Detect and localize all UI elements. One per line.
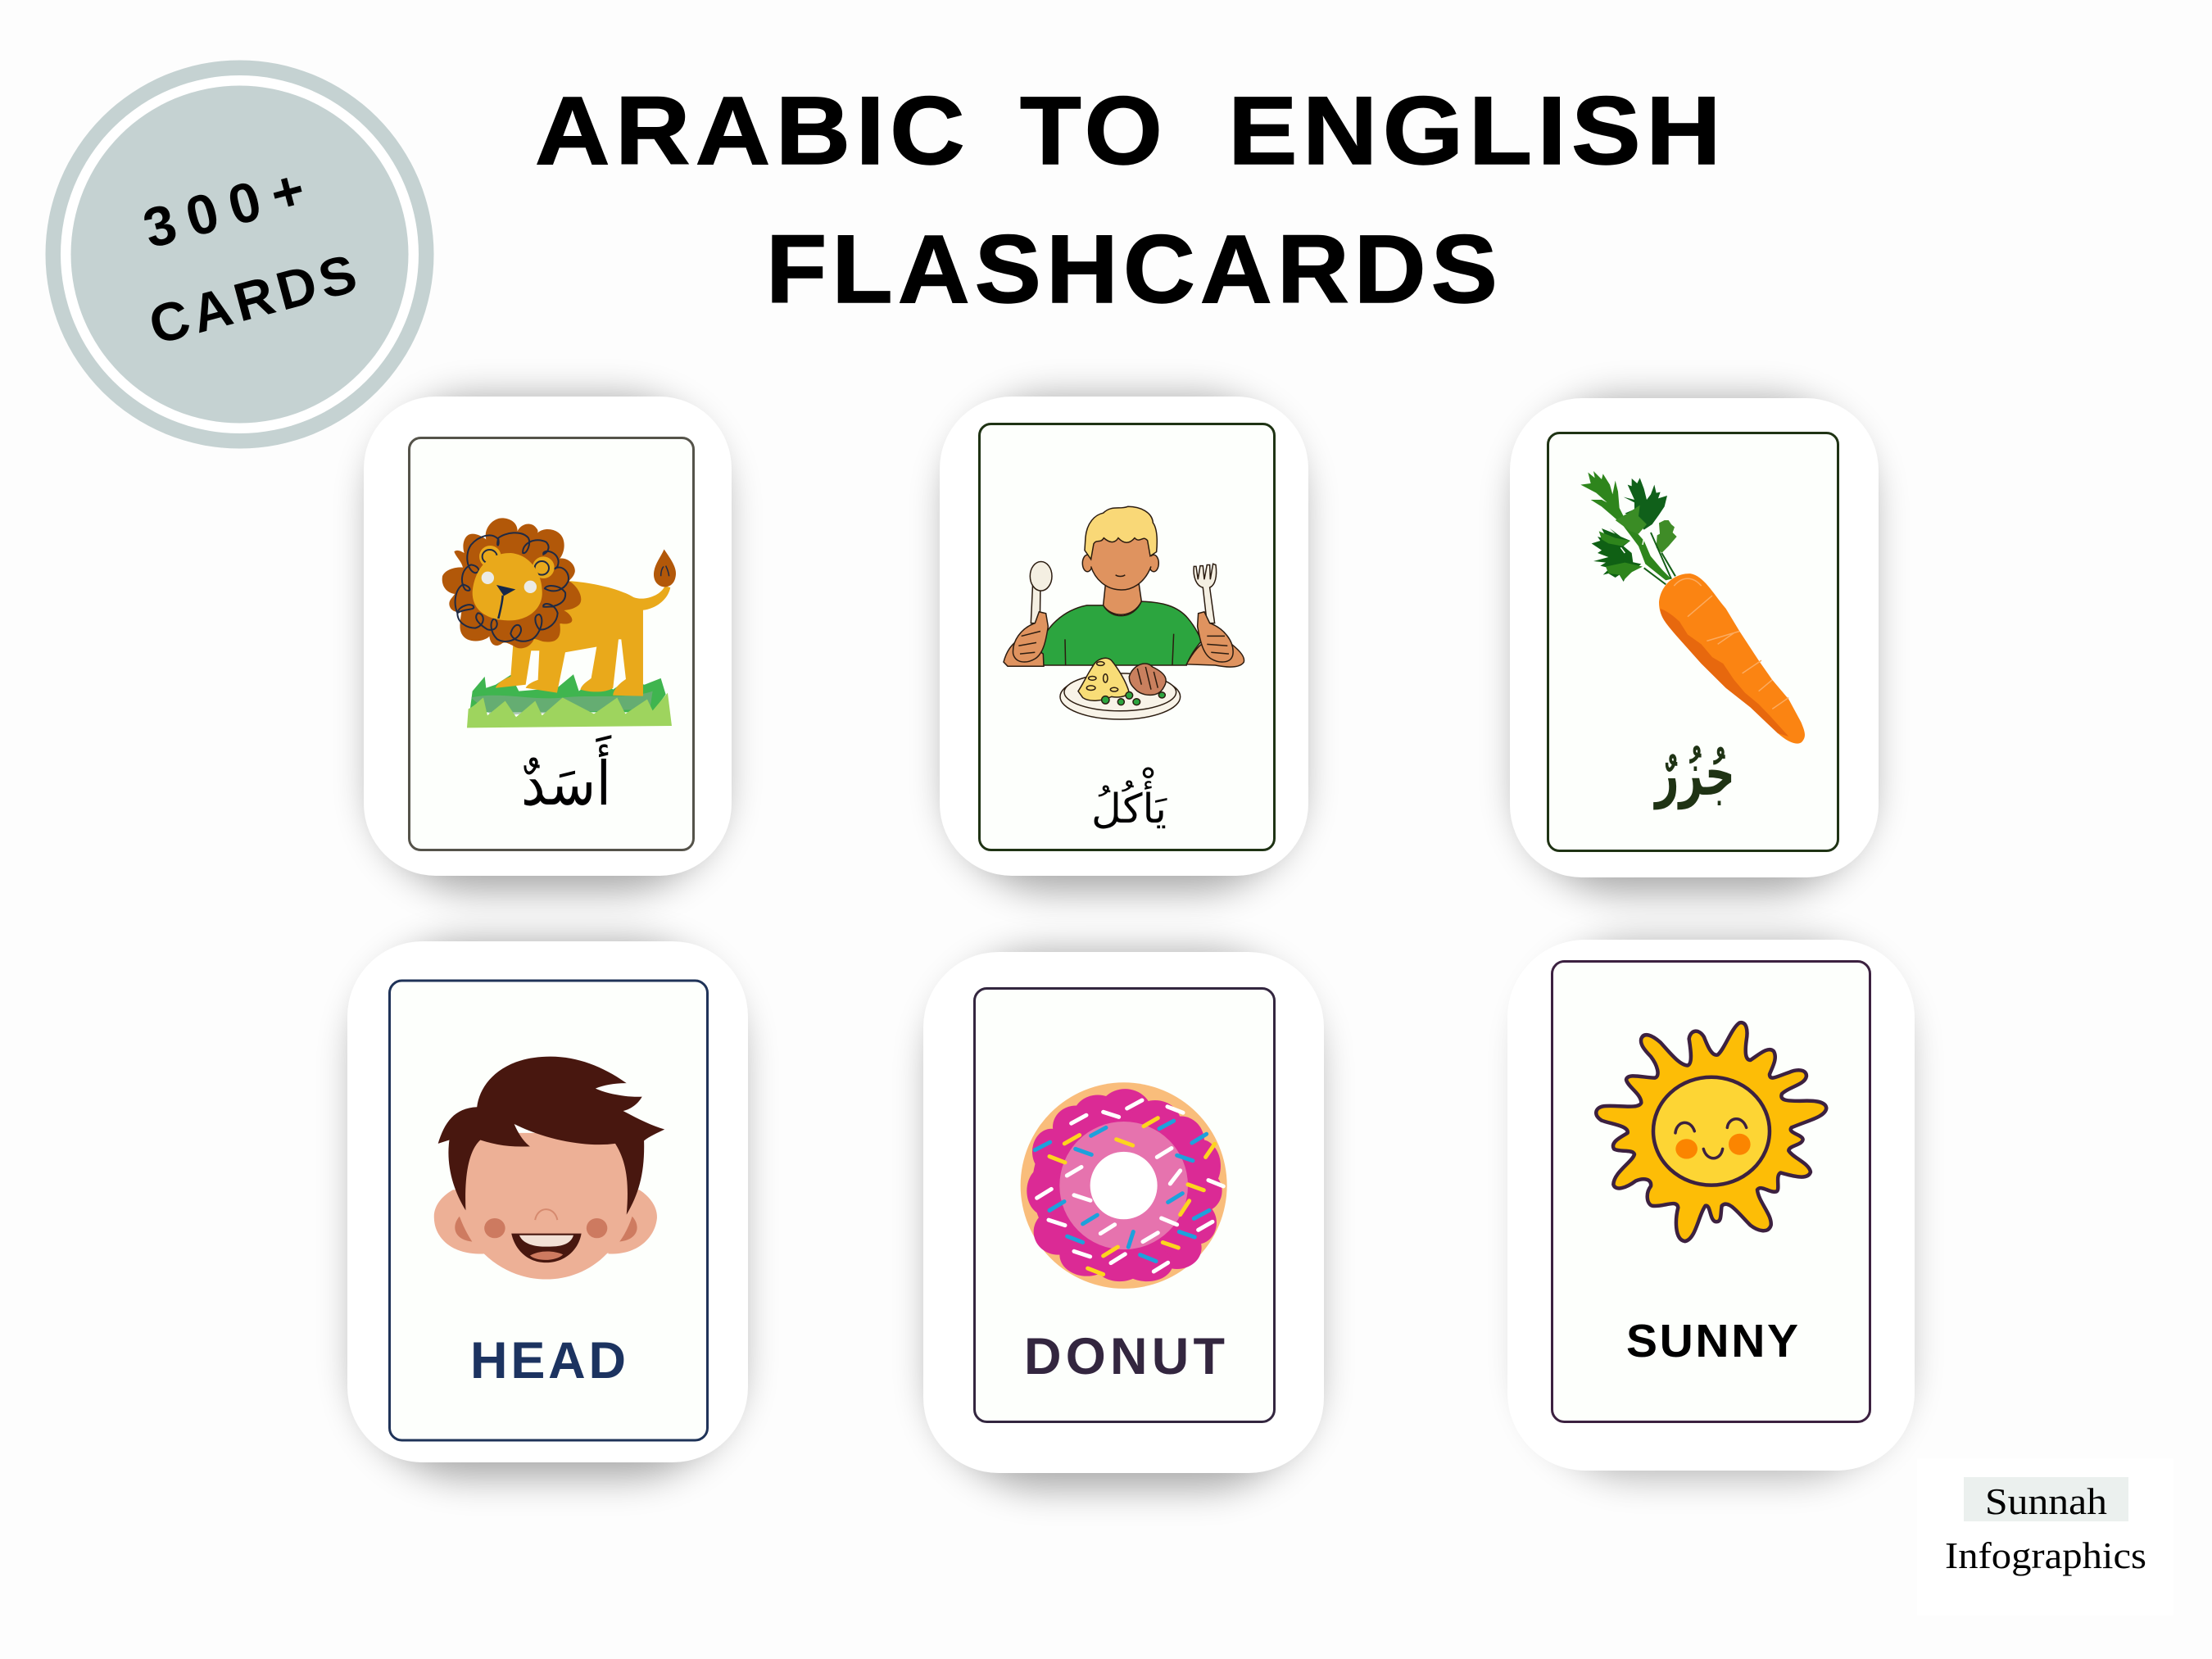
badge: 300+ cards [46,61,434,449]
title: FLASHCARDS [766,215,1503,324]
card: donut [923,952,1324,1489]
badge: 300+ cards: 300+ [137,157,311,261]
icon: boy head [434,1057,664,1280]
title [535,77,1726,324]
card: sunny [1507,940,1915,1478]
icon: carrot [1580,471,1805,744]
card: lion [364,397,732,891]
badge: 300+ cards: CARDS [143,243,363,356]
arabic word: eats: يَأْكُلُ [1091,767,1167,832]
icon: sun [1596,1022,1826,1241]
title: ARABIC [535,77,970,185]
english word: sunny: SUNNY [1626,1315,1798,1367]
card: head [347,941,748,1478]
icon: boy eating [1004,506,1244,719]
arabic word: carrot: جُزُرٌ [1653,738,1735,810]
english word: donut: DONUT [1024,1328,1225,1385]
logo: Sunnah Infographics: Infographics [1945,1534,2146,1576]
icon: donut [1021,1082,1227,1289]
title: ENGLISH [1228,77,1726,185]
english word: head: HEAD [470,1332,626,1389]
logo: Sunnah Infographics [1917,1458,2173,1616]
card: carrot [1510,398,1879,893]
title: TO [1020,77,1167,185]
card: eat [940,397,1308,891]
logo: Sunnah Infographics: Sunnah [1985,1480,2107,1522]
arabic word: lion: أَسَدٌ [521,735,612,819]
icon: lion [442,518,676,728]
